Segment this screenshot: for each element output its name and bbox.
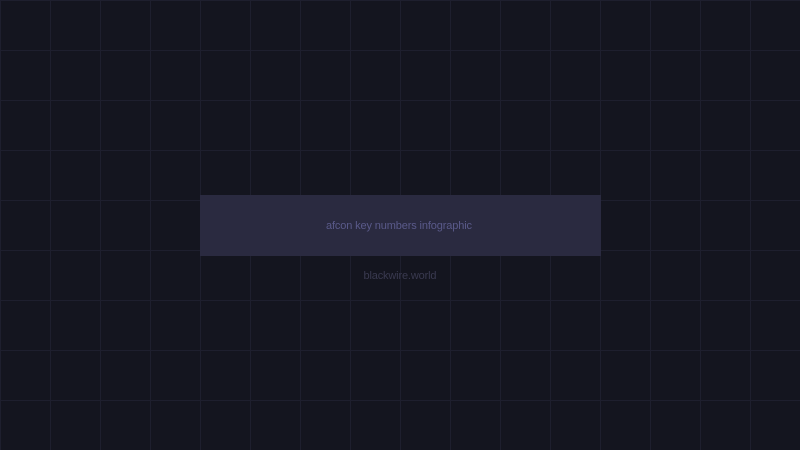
title: afcon key numbers infographic [326, 220, 472, 232]
source credit: blackwire.world [364, 270, 436, 282]
title banner [200, 195, 601, 256]
